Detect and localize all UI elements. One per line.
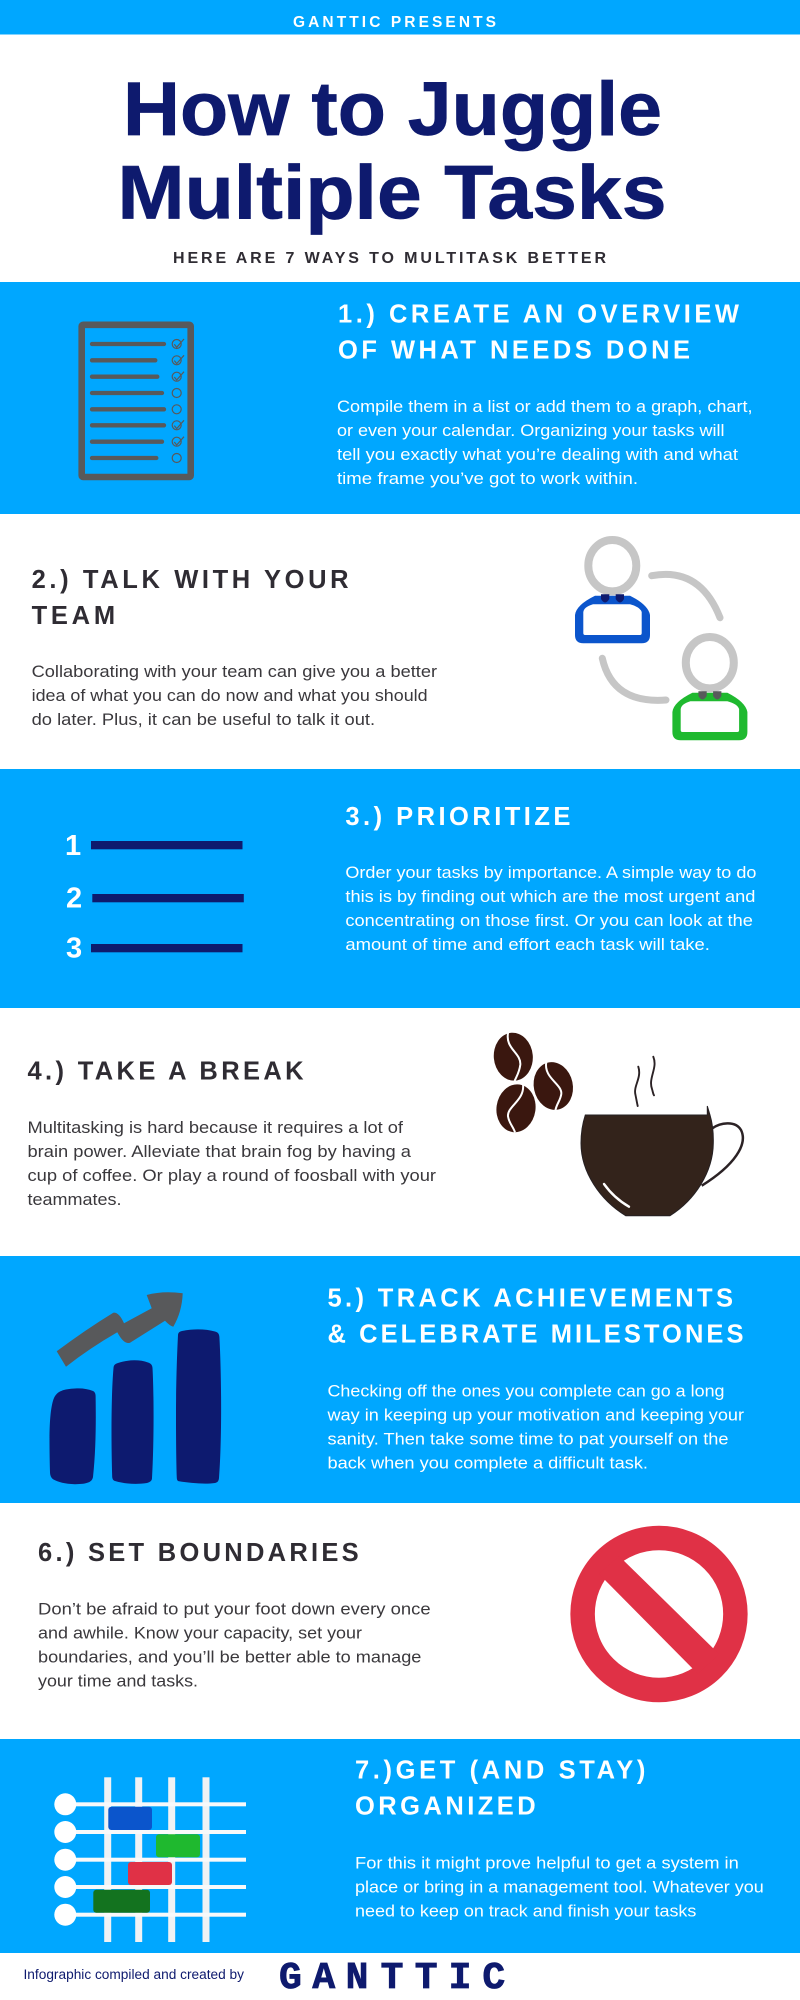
heading: 1.) CREATE AN OVERVIEW [338,301,740,329]
body text: way in keeping up your motivation and keeping your [326,1406,744,1425]
panel: step 1 overview [0,282,800,514]
title: How to Juggle [123,67,662,152]
heading [355,1757,645,1821]
body text [345,863,756,954]
footer credit: Infographic compiled and created by [24,1967,244,1982]
body text: or even your calendar. Organizing your tasks will [337,421,724,440]
body text: time frame you’ve got to work within. [337,469,638,488]
body text: Order your tasks by importance. A simple way to do [345,863,756,882]
icon: growth bar chart with arrow [50,1292,221,1484]
body text: idea of what you can do now and what you should [32,686,428,705]
panel: footer [0,1953,800,2000]
body text: For this it might prove helpful to get a system in [355,1853,739,1872]
body text: sanity. Then take some time to pat yourself on the [328,1430,728,1449]
body text: and awhile. Know your capacity, set your [38,1623,362,1642]
body text [38,1599,431,1690]
icon: ranked list: 1 [65,830,81,862]
icon: coffee cup [581,1057,743,1216]
icon: prohibition sign [583,1538,735,1690]
panel: step 5 achievements [0,1256,800,1503]
panel: step 4 break [0,1008,800,1256]
body text: tell you exactly what you’re dealing with and what [337,445,738,464]
body text: brain power. Alleviate that brain fog by having a [28,1142,412,1161]
body text [326,1382,744,1473]
heading [338,301,740,365]
heading: 6.) SET BOUNDARIES [38,1539,359,1567]
body text [355,1853,764,1920]
body text: Multitasking is hard because it requires a lot of [28,1118,403,1137]
body text: your time and tasks. [38,1671,198,1690]
body text: need to keep on track and finish your tasks [355,1901,696,1920]
body text [32,662,437,729]
icon: two team members with exchange arrows [575,540,747,740]
body text: amount of time and effort each task will take. [345,935,710,954]
body text: Collaborating with your team can give you a better [32,662,437,681]
body text: cup of coffee. Or play a round of foosball with your [28,1166,436,1185]
heading: 5.) TRACK ACHIEVEMENTS [328,1285,733,1313]
icon: ranked list: 2 [66,883,82,915]
panel: top banner [0,0,800,34]
icon: ranked list [65,830,244,965]
panel: step 7 organized [0,1739,800,1953]
title [118,67,666,236]
heading: 3.) PRIORITIZE [345,803,570,831]
panel: step 6 boundaries [0,1503,800,1739]
body text: Checking off the ones you complete can go a long [328,1382,724,1401]
heading [328,1285,744,1349]
body text: Compile them in a list or add them to a graph, chart, [337,397,752,416]
panel: step 2 team [0,514,800,769]
body text: back when you complete a difficult task. [328,1454,648,1473]
body text [337,397,752,488]
body text: Don’t be afraid to put your foot down every once [38,1599,431,1618]
body text: place or bring in a management tool. Whatever you [355,1877,764,1896]
body text: do later. Plus, it can be useful to talk it out. [32,710,375,729]
body text: boundaries, and you’ll be better able to manage [38,1647,421,1666]
panel: step 3 prioritize [0,769,800,1008]
icon: coffee beans [492,1031,577,1135]
heading: 7.)GET (AND STAY) [355,1757,645,1785]
title: Multiple Tasks [118,151,666,236]
logo: Ganttic wordmark: GANTTIC [279,1957,505,2000]
body text: teammates. [28,1190,122,1209]
panel: title [0,34,800,282]
subtitle: HERE ARE 7 WAYS TO MULTITASK BETTER [173,250,606,267]
heading: 4.) TAKE A BREAK [28,1057,304,1085]
banner text: GANTTIC PRESENTS [293,14,496,31]
icon: ranked list: 3 [66,933,82,965]
heading [32,566,349,630]
heading: TEAM [32,602,115,630]
body text: this is by finding out which are the most urgent and [345,887,755,906]
icon: gantt chart [54,1777,246,1942]
heading: & CELEBRATE MILESTONES [328,1321,744,1349]
body text [28,1118,436,1209]
heading: ORGANIZED [355,1793,536,1821]
body text: concentrating on those first. Or you can look at the [345,911,753,930]
icon: checklist [82,325,191,477]
heading: 2.) TALK WITH YOUR [32,566,349,594]
heading: OF WHAT NEEDS DONE [338,337,690,365]
